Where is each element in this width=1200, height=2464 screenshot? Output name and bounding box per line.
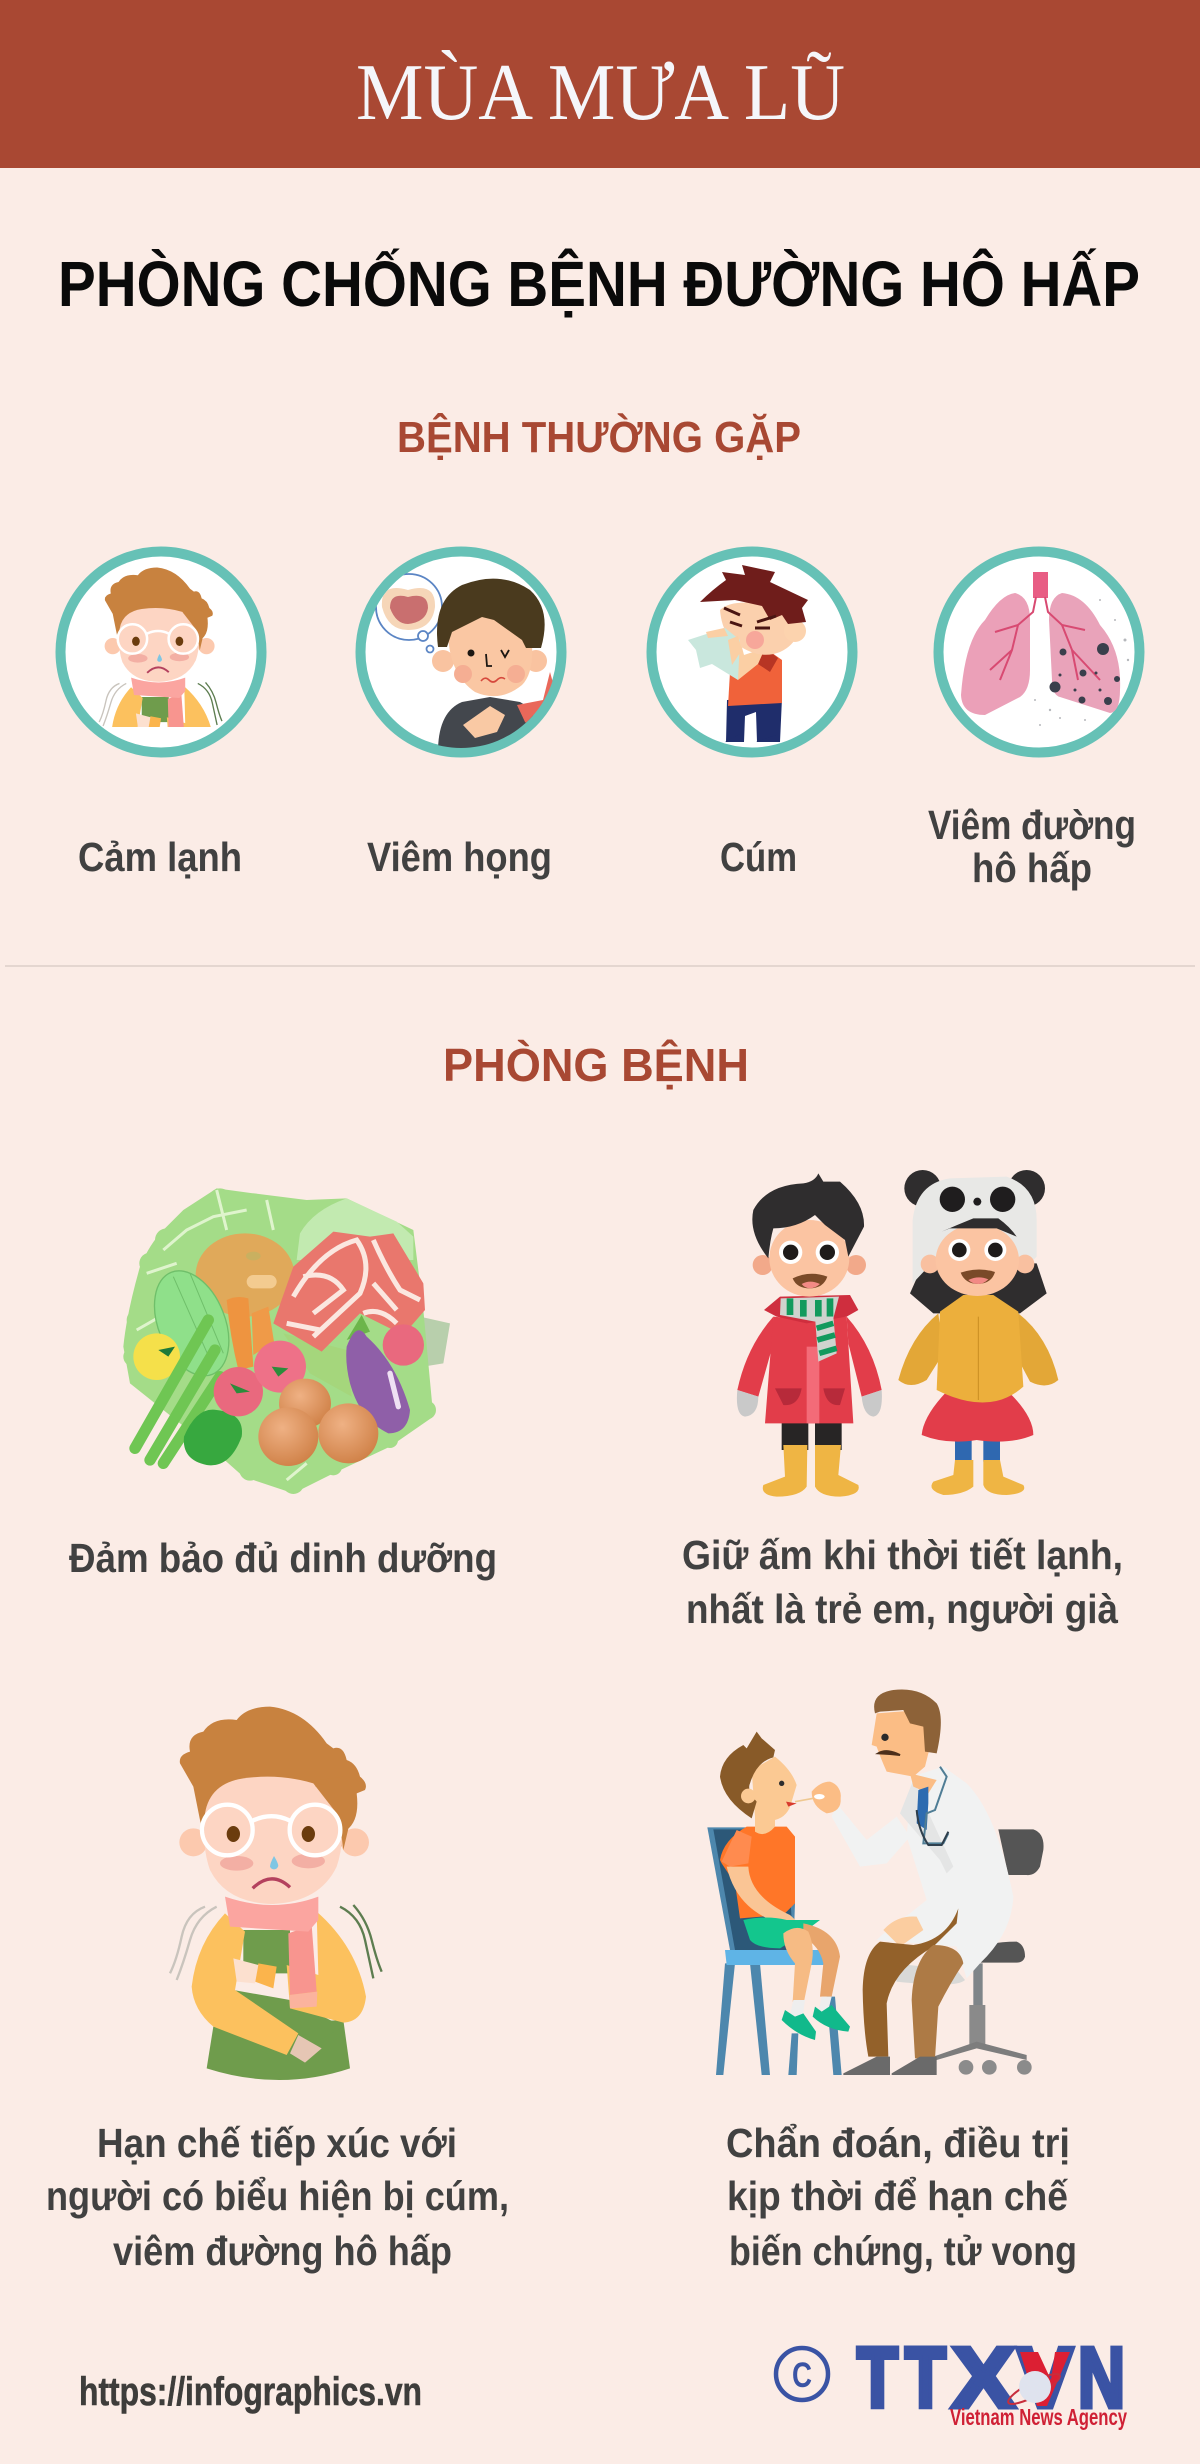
- title: MÙA MƯA LŨ: [356, 49, 845, 137]
- label: Viêm họng: Viêm họng: [367, 834, 552, 880]
- panel: diseases: [60, 552, 1140, 891]
- logo: copyright TTXVN: V: [1017, 2331, 1073, 2426]
- icon: cold boy: [60, 552, 262, 784]
- logo: copyright TTXVN: [776, 2331, 1127, 2430]
- illustration: kids in winter clothes: [737, 1170, 1058, 1497]
- label: keep warm: [682, 1532, 1123, 1632]
- illustration: sick boy: [170, 1707, 382, 2080]
- logo: copyright TTXVN: Vietnam News Agency: [950, 2404, 1127, 2430]
- illustration: doctor and child: [707, 1689, 1044, 2075]
- label: Viêm đường hô hấp: [928, 802, 1136, 891]
- logo: copyright TTXVN: T: [857, 2331, 898, 2426]
- heading: common diseases: BỆNH THƯỜNG GẶP: [397, 412, 801, 462]
- logo: copyright TTXVN: N: [1078, 2331, 1125, 2426]
- icon: flu boy: [652, 552, 852, 752]
- logo: copyright TTXVN: C: [792, 2356, 812, 2395]
- label: limit contact: người có biểu hiện bị cúm,: [46, 2173, 509, 2219]
- label: Viêm đường hô hấp: hô hấp: [972, 845, 1092, 891]
- label: timely diagnosis: biến chứng, tử vong: [729, 2228, 1077, 2274]
- label: Cúm: Cúm: [720, 834, 797, 880]
- label: timely diagnosis: kịp thời để hạn chế: [727, 2173, 1068, 2219]
- footer url: https://infographics.vn: [79, 2370, 422, 2414]
- label: timely diagnosis: Chẩn đoán, điều trị: [726, 2120, 1070, 2166]
- logo: copyright TTXVN: T: [905, 2331, 946, 2426]
- label: limit contact: Hạn chế tiếp xúc với: [97, 2120, 457, 2166]
- illustration: food: [123, 1188, 450, 1494]
- label: keep warm: nhất là trẻ em, người già: [686, 1586, 1118, 1632]
- heading: prevention: PHÒNG BỆNH: [443, 1039, 749, 1091]
- label: Viêm đường hô hấp: Viêm đường: [928, 802, 1136, 848]
- label: Cảm lạnh: Cảm lạnh: [78, 834, 242, 880]
- label: keep warm: Giữ ấm khi thời tiết lạnh,: [682, 1532, 1123, 1578]
- panel: prevention: [46, 1170, 1123, 2274]
- icon: lungs: [938, 552, 1140, 752]
- logo: copyright TTXVN: X: [952, 2331, 1015, 2426]
- header banner: [0, 0, 1200, 168]
- label: limit contact: [46, 2120, 509, 2274]
- label: timely diagnosis: [726, 2120, 1077, 2274]
- icon: sore throat boy: [360, 552, 562, 752]
- label: nutrition: Đảm bảo đủ dinh dưỡng: [69, 1535, 497, 1581]
- label: limit contact: viêm đường hô hấp: [113, 2228, 452, 2274]
